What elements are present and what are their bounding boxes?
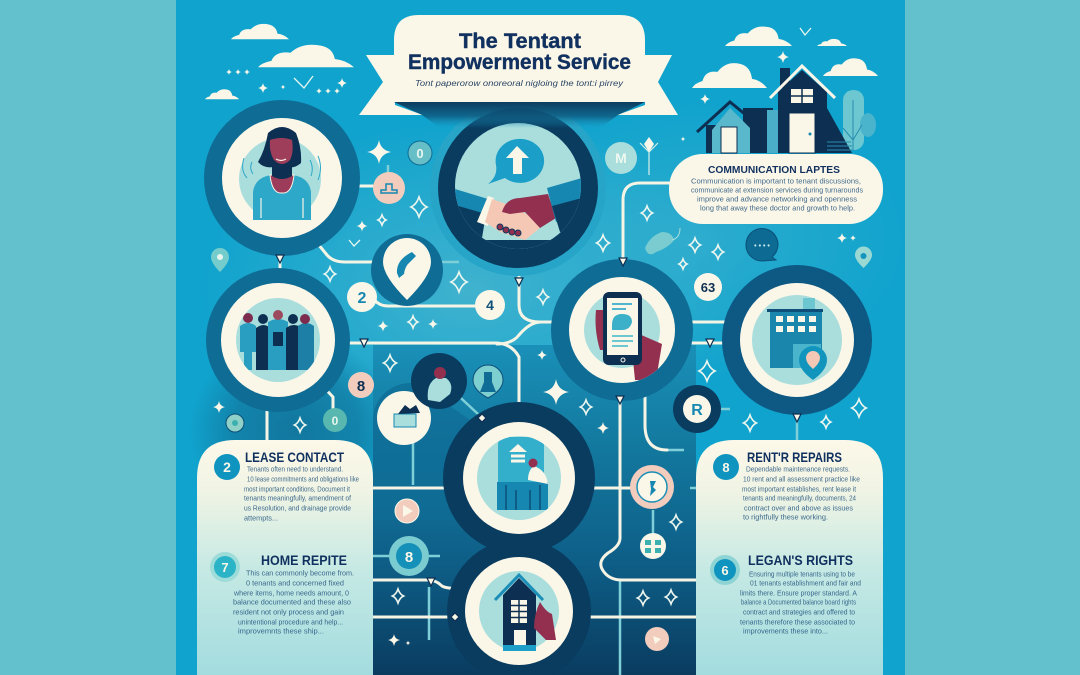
decorative solid stars [213, 51, 856, 646]
callout body text: improve and advance networking and openness [697, 194, 857, 204]
badge: 8 teal [389, 536, 429, 576]
heading: rent'r repairs: RENT'R REPAIRS [747, 449, 842, 465]
text block: home repite: balance documented and these also [233, 598, 351, 606]
callout body text: communicate at extension services during turnarounds [691, 186, 863, 194]
text block: legan's rights: limits there. Ensure proper standard. A [740, 588, 857, 598]
small number badges and nodes [211, 28, 872, 651]
text block: rent'r repairs: 10 rent and all assessment practice like [743, 474, 860, 484]
connector lines [267, 165, 797, 675]
text block: home repite: unintentional procedure and help... [238, 618, 343, 626]
badge: number 8: 8 [722, 460, 730, 475]
text block: home repite: improvemnts these ship... [238, 626, 324, 636]
badge: M [605, 142, 637, 174]
circle: apartment building [722, 265, 872, 415]
callout body text [691, 176, 863, 212]
badge: number 6 [710, 555, 740, 585]
text block: legan's rights: Ensuring multiple tenants using to be [749, 570, 855, 578]
node: 4: 4 [486, 297, 494, 313]
heading: home repite: HOME REPITE [261, 552, 347, 568]
subtitle: Tont paperorow onoreoral nigloing the tont:i pirrey [415, 78, 624, 88]
panel: right card [696, 440, 883, 675]
badge: navy R [673, 385, 721, 433]
circle: home [447, 539, 591, 675]
badge: number 2: 2 [223, 459, 231, 475]
text block: lease contact: 10 lease commitments and obligations like [247, 474, 359, 484]
icon: speech bubble [746, 229, 778, 261]
text block: home repite [233, 568, 354, 636]
badge: 0: 0 [416, 146, 424, 161]
text block: lease contact: tenants meaningfully, amendment of [244, 494, 352, 502]
text block: lease contact [244, 464, 359, 522]
decorative outline stars [294, 197, 866, 605]
callout body text: long that away these doctor and growth to help. [700, 204, 855, 212]
circle: center building [443, 402, 595, 554]
badge: number 8 [713, 454, 739, 480]
text block: lease contact: Tenants often need to understand. [247, 464, 343, 474]
badge: play [395, 499, 419, 523]
circle: community group [206, 268, 350, 412]
heading: legan's rights: LEGAN'S RIGHTS [748, 552, 853, 568]
text block: home repite: This can commonly become from. [246, 568, 354, 578]
title banner [359, 15, 678, 128]
text block: lease contact: attempts... [244, 514, 278, 522]
panel: main infographic area [176, 0, 910, 675]
text block: rent'r repairs: to rightfully these working. [743, 512, 828, 522]
pin: right teal [855, 246, 872, 268]
text block: legan's rights: balance a Documented balance board rights [741, 598, 856, 606]
title banner: Empowerment Service [408, 51, 631, 74]
node: 2 [347, 282, 377, 312]
text block: rent'r repairs [742, 464, 860, 522]
callout body text: Communication is important to tenant discussions, [691, 176, 861, 186]
small circle: person [411, 353, 467, 409]
panel: left card [197, 440, 373, 675]
small chevrons [294, 28, 811, 246]
text block: legan's rights: 01 tenants establishment and fair and [750, 578, 861, 588]
text block: legan's rights: contract and strategies and offered to [743, 608, 855, 616]
pin: teal tower [473, 365, 503, 398]
badge: green 0: 0 [332, 414, 339, 428]
circle: tenant person [204, 100, 360, 256]
text block: lease contact: most important conditions, Document it [244, 484, 351, 494]
badge: peach 8 [348, 372, 374, 398]
node markers [276, 255, 801, 621]
text block: rent'r repairs: most important establishes, rent lease it [742, 484, 857, 494]
badge: number 2 [214, 454, 240, 480]
icon: leaf sprout [640, 137, 658, 175]
text block: legan's rights [740, 570, 861, 636]
badge: green 0 [323, 408, 347, 432]
small circle: envelope and folder [377, 391, 431, 445]
heading: lease contact: LEASE CONTACT [245, 449, 344, 465]
badge: number 6: 6 [721, 563, 729, 578]
node: 4 [475, 290, 505, 320]
badge: tray icon [373, 172, 405, 204]
communication callout card: COMMUNICATION LAPTES [708, 165, 840, 176]
icon: blob [645, 228, 680, 254]
banner ribbon tails [359, 55, 678, 115]
circle: handshake [430, 100, 606, 276]
badge: play lower [645, 627, 669, 651]
clouds [205, 24, 878, 99]
badge: number 7: 7 [221, 560, 229, 575]
badge: 8 teal: 8 [405, 549, 413, 566]
title text: The Tentant [459, 30, 581, 53]
node: 2: 2 [358, 290, 367, 307]
pin: small left [211, 248, 229, 272]
badge: M: M [615, 150, 627, 166]
text block: rent'r repairs: tenants and meaningfully, documents, 24 [743, 494, 856, 502]
badge: 63 [694, 273, 722, 301]
banner body [394, 15, 645, 102]
badge: 0 [408, 141, 432, 165]
badge: 63: 63 [701, 280, 715, 295]
house illustration [697, 66, 876, 153]
badge: peach key [630, 465, 674, 509]
map pin: phone [371, 234, 443, 306]
pin: green small [226, 414, 244, 432]
text block: rent'r repairs: Dependable maintenance requests. [746, 464, 850, 474]
text block: legan's rights: improvements these into... [743, 626, 828, 636]
text block: lease contact: us Resolution, and drainage provide [244, 504, 351, 512]
text block: rent'r repairs: contract over and above as issues [744, 504, 853, 512]
text block: legan's rights: tenants therefore these associated to [740, 618, 855, 626]
badge: number 7 [210, 552, 240, 582]
badge: peach 8: 8 [357, 378, 365, 395]
text block: home repite: resident not only process and gain [233, 608, 344, 616]
badge: navy R: R [691, 402, 703, 419]
badge: green squares [640, 533, 666, 559]
text block: home repite: 0 tenants and concerned fixed [246, 578, 344, 588]
circle: phone app [551, 259, 693, 401]
text block: home repite: where items, home needs amount, 0 [233, 588, 349, 598]
icon: speech bubble: • • • • [754, 243, 770, 250]
communication callout card [669, 154, 883, 224]
